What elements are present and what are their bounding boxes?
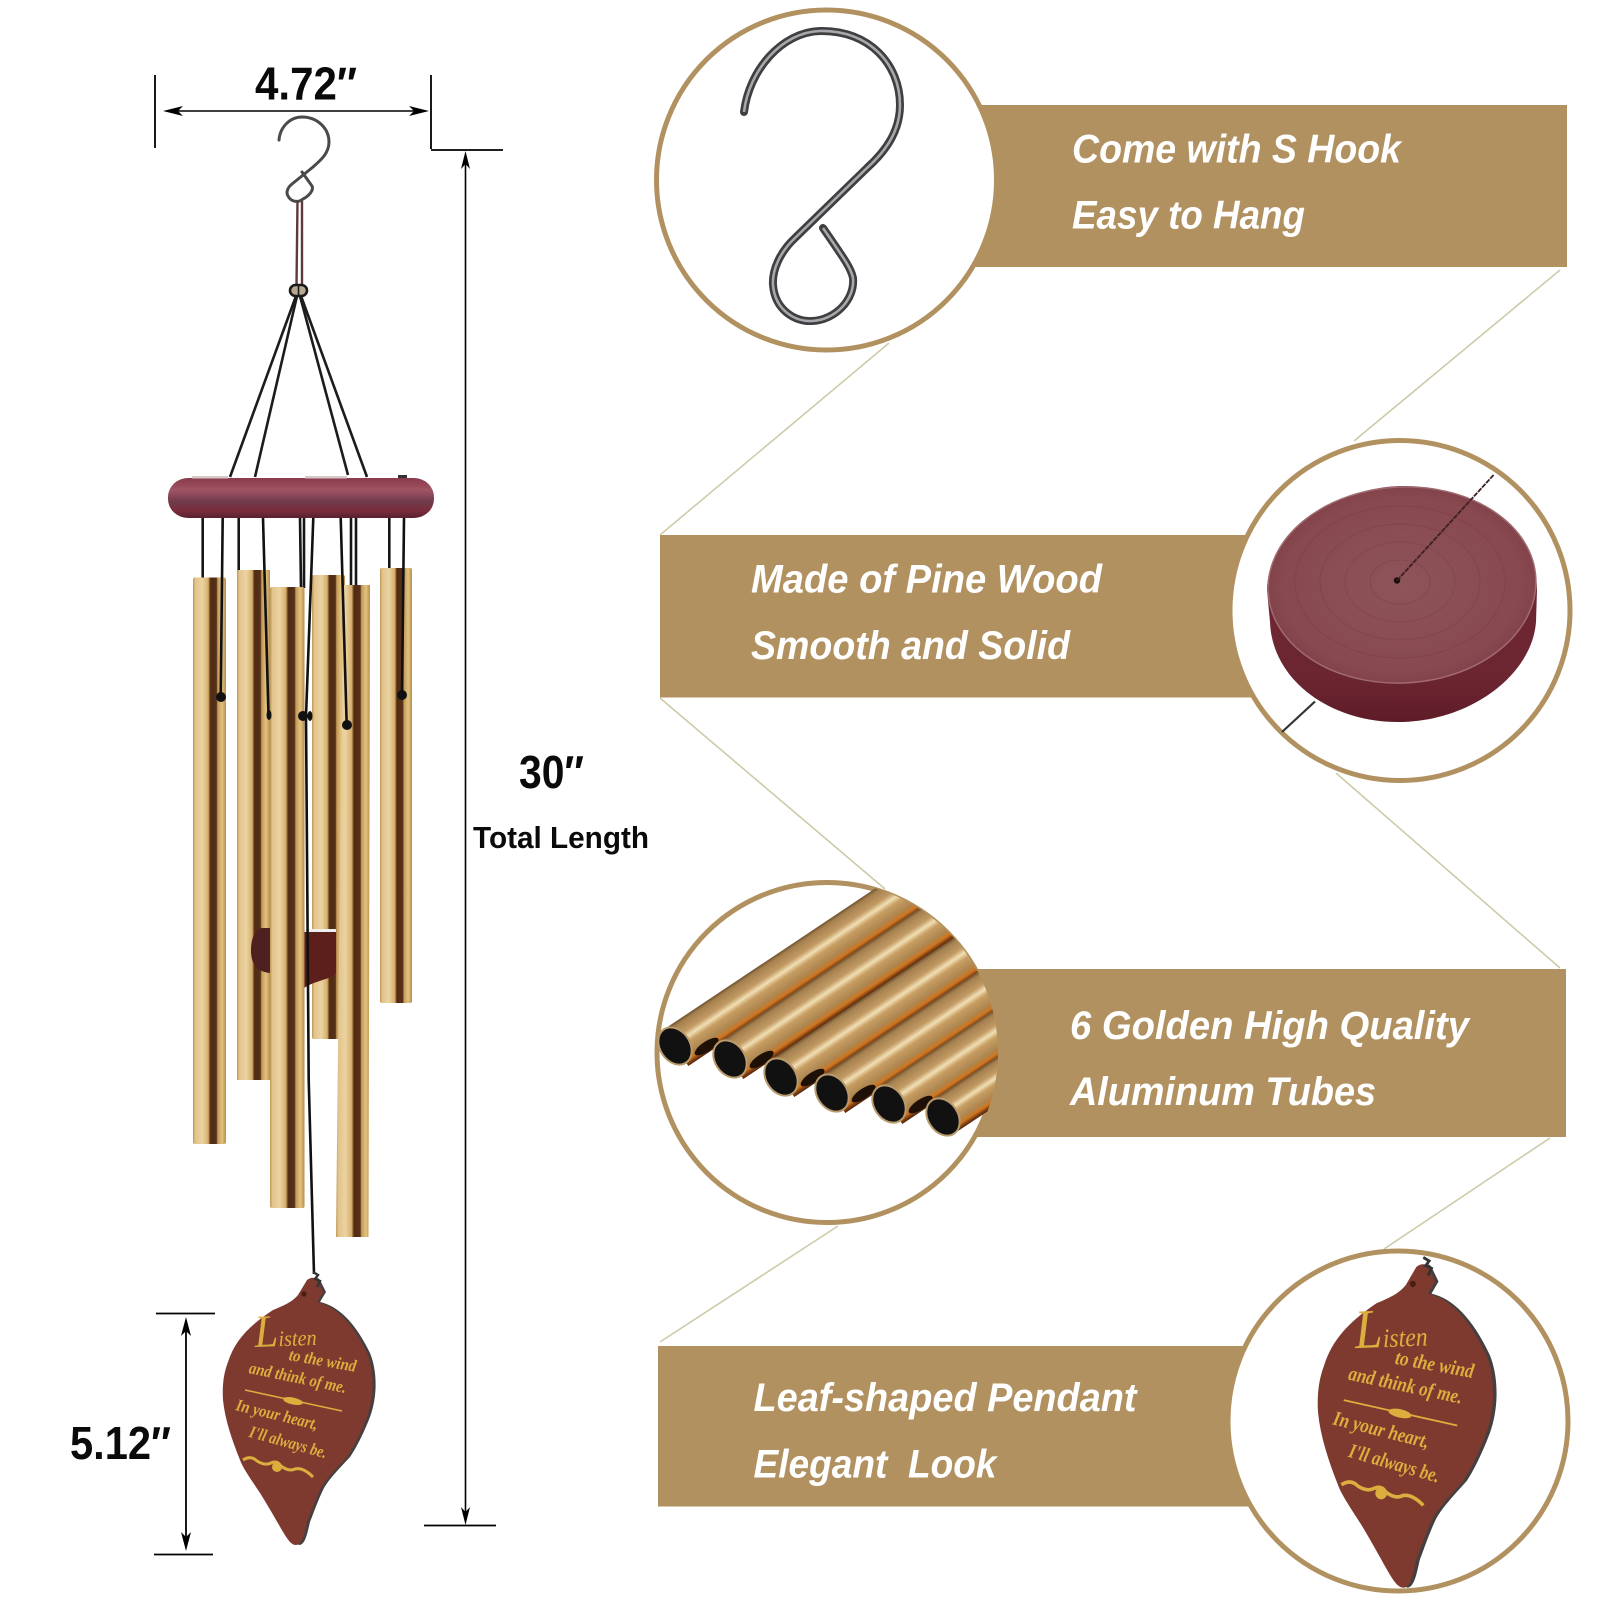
tube 5 [336,585,370,1237]
banner: leaf pendant: Leaf-shaped Pendant [754,1376,1138,1420]
tube 3 [270,587,304,1208]
leaf shape [223,1272,376,1545]
leaf inscription: I'll always be. [246,1422,329,1462]
banner: S hook: Come with S Hook [1072,128,1403,172]
panel: pine wood [660,440,1570,780]
clapper strings and beads [216,518,407,1274]
pendant dimension: 5.12 inches [70,1314,215,1554]
wind chime product [168,117,434,1545]
total length dimension: 30 inches: 30″ [519,746,584,798]
banner: leaf pendant: Elegant Look [754,1442,998,1486]
connector lines [660,270,1560,1342]
panel: leaf pendant [658,1251,1568,1591]
tube 2 [237,570,270,1080]
tube strings [203,518,389,588]
hanging cord and knot [290,201,307,296]
pendant dimension: 5.12 inches: 5.12″ [70,1417,171,1469]
leaf inscription: Listen [253,1304,317,1357]
circle: leaf close-up: Listen [1353,1296,1428,1360]
circle: leaf close-up [1228,1251,1568,1591]
small S hook [279,117,329,201]
banner: leaf pendant [658,1346,1278,1506]
total length dimension: 30 inches: Total Length [473,820,649,855]
banner: tubes: Aluminum Tubes [1069,1070,1376,1114]
panel: aluminium tubes [654,880,1566,1225]
banner: pine wood: Smooth and Solid [751,624,1071,668]
banner: pine wood: Made of Pine Wood [751,558,1103,602]
circle: golden tubes [654,880,998,1225]
leaf inscription: In your heart, [233,1395,320,1434]
circle: wooden disc [1230,440,1570,780]
panel: S hook [656,10,1567,350]
tube 4 [312,575,345,1039]
banner: pine wood [660,535,1280,698]
leaf inscription: to the wind [288,1345,358,1376]
leaf inscription: and think of me. [247,1358,348,1397]
tube 1 [193,578,226,1144]
wooden striker [251,928,336,988]
suspension strings [230,296,367,477]
circle: leaf close-up: and think of me. [1347,1363,1464,1409]
banner: S hook: Easy to Hang [1072,194,1305,238]
tube 6 [380,568,412,1003]
banner: tubes: 6 Golden High Quality [1070,1004,1471,1048]
circle: leaf close-up: In your heart, [1330,1407,1431,1453]
width dimension: 4.72 inches: 4.72″ [255,58,357,110]
total length dimension: 30 inches [424,150,649,1526]
banner: tubes [950,969,1566,1137]
circle: leaf close-up: I'll always be. [1345,1440,1442,1488]
circle: leaf close-up: to the wind [1394,1347,1476,1383]
circle: S hook [656,10,996,350]
banner: S hook [950,105,1567,267]
wooden disc [168,475,434,518]
leaf inscription [233,1304,358,1477]
leaf pendant [223,1272,376,1545]
width dimension: 4.72 inches [155,58,431,149]
